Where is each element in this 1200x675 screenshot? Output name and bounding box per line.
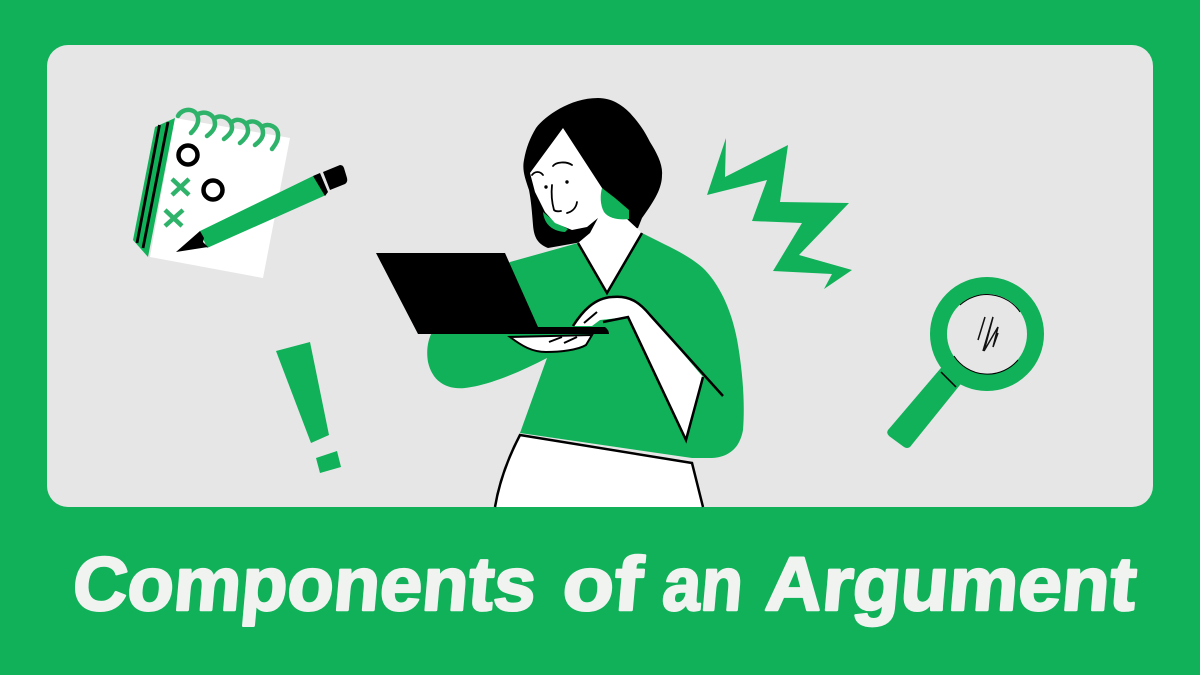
body and sleeves [427, 233, 744, 458]
face and neck [530, 128, 642, 293]
left earring [543, 212, 568, 232]
title [70, 542, 1140, 627]
title: Argument [763, 542, 1140, 627]
notepad spiral rings [178, 110, 278, 149]
checklist circles and crosses [165, 146, 222, 226]
pencil [176, 165, 347, 252]
lower hand [510, 335, 592, 352]
icon: exclamation mark [276, 342, 341, 473]
magnifier ring [938, 286, 1036, 382]
icon: magnifying glass [887, 286, 1036, 448]
notepad paper [150, 118, 290, 278]
title: Components [70, 542, 540, 627]
title: of [560, 542, 647, 627]
icon: notepad with pencil [133, 110, 347, 278]
title: an [660, 542, 747, 627]
laptop [376, 253, 609, 334]
skirt [495, 435, 703, 507]
lens scribble [978, 317, 998, 351]
right earring [601, 188, 629, 219]
icon: lightning zigzag [707, 138, 852, 289]
hair [523, 98, 662, 248]
magnifier handle [887, 362, 964, 448]
panel: grey illustration panel [47, 45, 1153, 507]
upper hand and sleeve arm [573, 297, 703, 440]
notepad spine [133, 118, 175, 257]
facial features [532, 162, 577, 213]
neckline [578, 233, 642, 293]
icon: woman using a laptop [376, 98, 744, 507]
